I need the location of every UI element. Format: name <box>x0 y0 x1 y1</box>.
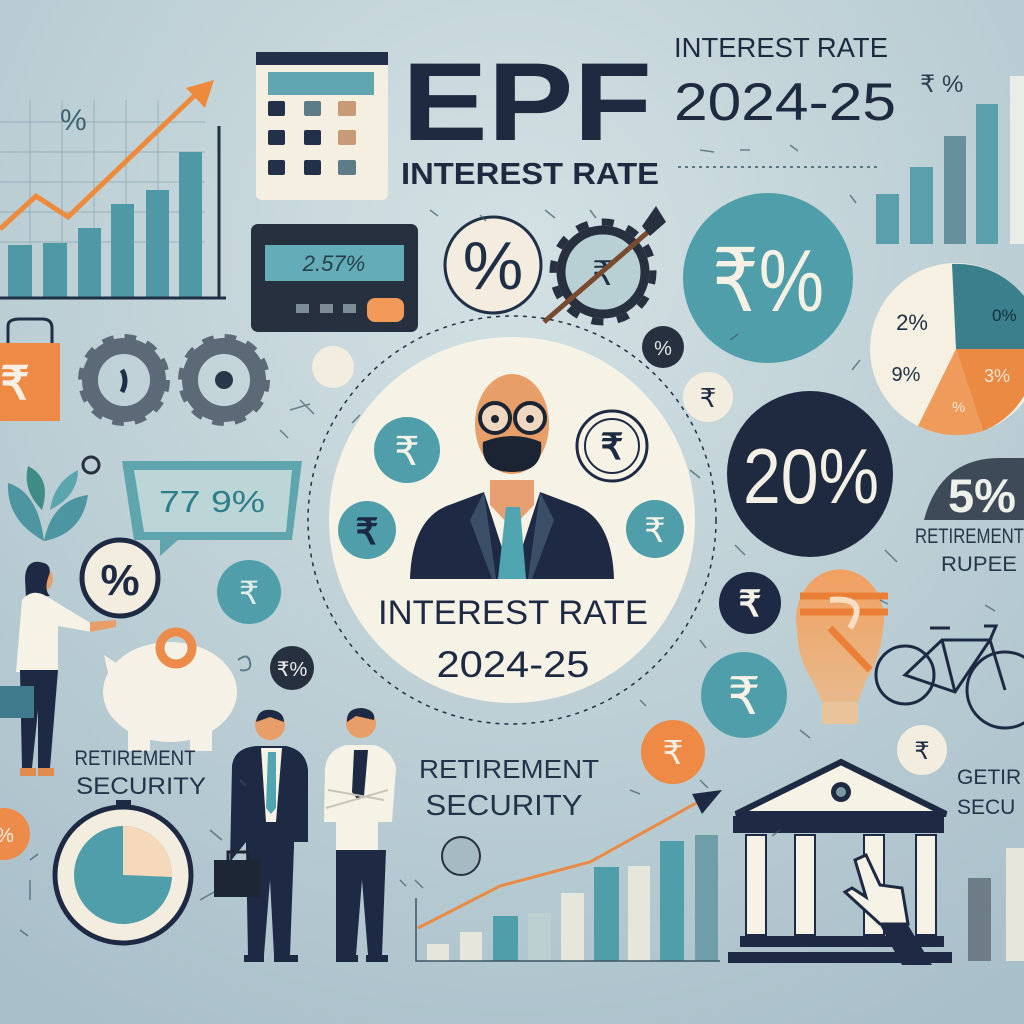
text: retirement security left <box>74 747 206 800</box>
icon: rupee coin navy <box>719 572 781 634</box>
icon: cream rupee coin lower right: ₹ <box>914 738 930 765</box>
pie chart <box>870 263 1024 435</box>
text: cropped security label <box>957 766 1021 819</box>
icon: rupee gear with wrench <box>544 206 666 322</box>
icon: teal rupee top left <box>374 417 440 483</box>
icon: clock with pie <box>55 800 191 943</box>
icon: dark payment terminal: 2.57% <box>302 251 365 276</box>
icon: person presenting <box>0 562 116 776</box>
icon: navy ring rupee <box>577 411 647 481</box>
icon: percent coin: % <box>463 228 523 304</box>
text: retirement security centre: RETIREMENT <box>419 754 599 784</box>
chart: bottom right small bars <box>968 848 1024 961</box>
icon: teal rupee right <box>626 500 684 558</box>
icon: cream rupee coin small <box>683 372 733 422</box>
text: retirement security centre: SECURITY <box>426 790 582 822</box>
icon: bank building <box>728 762 952 965</box>
text: Interest Rate 2024-25 <box>378 594 648 685</box>
icon: orange shopping bag with rupee <box>0 319 60 421</box>
icon: plant leaves <box>8 457 99 541</box>
icon: 5% badge with retirement rupee text: RUPEE <box>941 553 1017 576</box>
chart: top-left rising bars with arrow <box>0 80 226 298</box>
chart: top-right bars: ₹ % <box>920 71 963 98</box>
text: Interest Rate 2024-25: 2024-25 <box>436 644 590 685</box>
text: Interest Rate 2024-25: INTEREST RATE <box>378 594 648 632</box>
text: retirement security left: SECURITY <box>76 773 206 800</box>
icon: rupee coin teal <box>701 652 787 738</box>
pie chart: 0% <box>992 306 1017 325</box>
icon: teal rupee top left: ₹ <box>394 430 420 474</box>
pie chart: 3% <box>984 366 1010 386</box>
icon: grey gears <box>83 339 265 421</box>
heading: Interest Rate 2024-25 <box>674 32 896 132</box>
text: retirement security left: RETIREMENT <box>74 747 196 770</box>
chart: bottom bars with arrow <box>416 790 722 961</box>
text: cropped security label: SECU <box>957 796 1015 819</box>
icon: 5% badge with retirement rupee text: 5% <box>948 469 1016 522</box>
icon: navy ring rupee: ₹ <box>601 426 623 467</box>
main circle panel <box>308 316 716 724</box>
icon: teal rupee right: ₹ <box>644 512 666 550</box>
icon: navy percent coin small: % <box>654 338 672 360</box>
icon: dark circle 20% <box>727 391 893 557</box>
icon: percent coin <box>445 217 541 313</box>
icon: teal rupee left: ₹ <box>356 511 378 552</box>
icon: dark payment terminal <box>251 224 418 332</box>
heading: Interest Rate 2024-25: INTEREST RATE <box>674 32 888 63</box>
icon: piggy bank <box>103 632 250 751</box>
chart: top-left rising bars with arrow: % <box>60 104 87 137</box>
icon: navy percent coin small <box>642 326 684 368</box>
icon: rupee coin orange <box>641 720 705 784</box>
subtitle: Interest Rate: INTEREST RATE <box>401 156 659 191</box>
icon: 5% badge with retirement rupee text <box>915 458 1024 576</box>
icon: rupee gear with wrench: ₹ <box>592 255 614 293</box>
icon: rupee light bulb <box>796 569 888 724</box>
figure: businessman with briefcase <box>214 710 308 962</box>
icon: cream rupee coin small: ₹ <box>700 383 716 413</box>
icon: percent coin by person <box>82 540 158 616</box>
icon: rupee coin teal: ₹ <box>727 668 761 726</box>
icon: dark circle 20%: 20% <box>743 432 879 520</box>
callout: percentage banner: 77 9% <box>159 484 265 519</box>
icon: small grey coin <box>442 837 480 875</box>
icon: teal rupee coin <box>217 560 281 624</box>
pie chart: 2% <box>896 310 928 335</box>
pie chart: 9% <box>892 364 921 386</box>
chart: top-right bars <box>678 71 1024 244</box>
icon: orange coin left edge <box>0 808 30 860</box>
icon: rupee coin navy: ₹ <box>739 583 761 624</box>
icon: dark rupee percent coin <box>270 646 314 690</box>
icon: pointing hand <box>845 855 932 965</box>
icon: dark rupee percent coin: ₹% <box>277 659 307 681</box>
icon: teal rupee percent circle: ₹% <box>712 231 824 330</box>
figure: bald man in suit <box>410 374 614 579</box>
icon: rupee coin orange: ₹ <box>662 734 684 771</box>
icon: orange shopping bag with rupee: ₹ <box>0 357 30 409</box>
figure: businessman arms crossed <box>324 708 396 962</box>
icon: bicycle <box>876 626 1024 728</box>
icon: white calculator <box>256 52 388 200</box>
decorative scattered marks <box>20 145 995 936</box>
pie chart: % <box>952 399 965 416</box>
icon: teal rupee left <box>338 501 396 559</box>
icon: teal rupee coin: ₹ <box>239 575 259 611</box>
icon: percent coin by person: % <box>100 556 140 605</box>
text: retirement security centre <box>419 754 599 822</box>
icon: cream rupee coin lower right <box>897 725 947 775</box>
text: cropped security label: GETIR <box>957 766 1021 789</box>
title: EPF: EPF <box>402 40 652 164</box>
heading: Interest Rate 2024-25: 2024-25 <box>674 73 896 132</box>
callout: percentage banner <box>122 461 302 556</box>
icon: teal rupee percent circle <box>683 193 853 363</box>
icon: small white coin <box>312 346 354 388</box>
